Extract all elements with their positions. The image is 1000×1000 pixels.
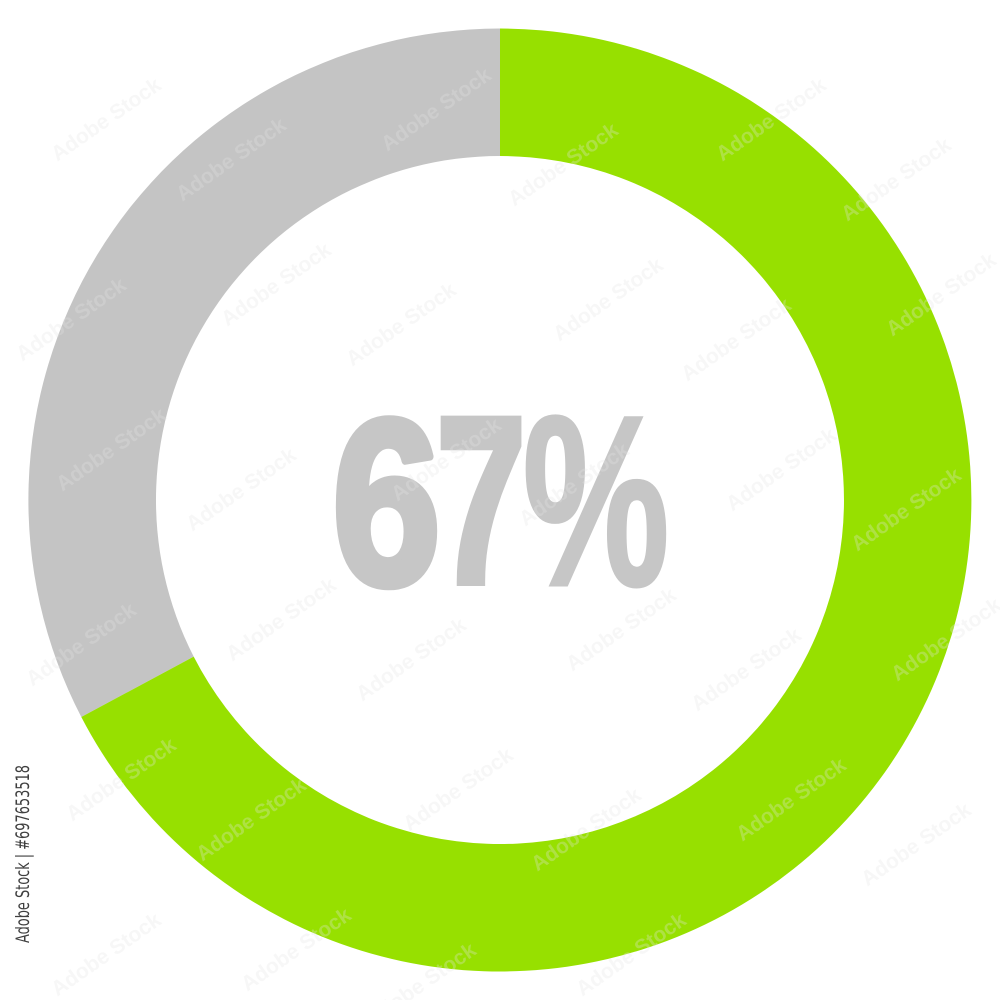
watermark: Adobe Stock xyxy=(687,623,806,716)
watermark: Adobe Stock xyxy=(722,423,841,516)
watermark: Adobe Stock xyxy=(172,113,291,206)
watermark: Adobe Stock xyxy=(47,73,166,166)
percentage label xyxy=(332,366,669,638)
watermark: Adobe Stock xyxy=(732,753,851,846)
watermark: Adobe Stock xyxy=(192,773,311,866)
watermark: Adobe Stock xyxy=(837,133,956,226)
watermark: Adobe Stock xyxy=(342,278,461,371)
remaining 33% grey segment xyxy=(28,28,500,717)
watermark: Adobe Stock xyxy=(352,613,471,706)
watermark: Adobe Stock xyxy=(52,403,171,496)
watermark: Adobe Stock xyxy=(712,73,831,166)
watermark: Adobe Stock xyxy=(62,733,181,826)
watermark: Adobe Stock xyxy=(237,903,356,996)
watermark: Adobe Stock xyxy=(847,463,966,556)
watermark: Adobe Stock xyxy=(527,783,646,876)
watermark: Adobe Stock xyxy=(549,253,668,346)
watermark: Adobe Stock xyxy=(562,583,681,676)
digit 6: 6 xyxy=(332,371,441,634)
watermark: Adobe Stock xyxy=(182,443,301,536)
watermark: Adobe Stock xyxy=(515,438,634,531)
watermark: Adobe Stock xyxy=(47,908,166,1000)
watermark: Adobe Stock xyxy=(387,413,506,506)
watermark: Adobe Stock xyxy=(22,598,141,691)
watermark: Adobe Stock xyxy=(572,908,691,1000)
watermark: Adobe Stock xyxy=(377,63,496,156)
watermark: Adobe Stock xyxy=(12,273,131,366)
watermark: Adobe Stock xyxy=(677,293,796,386)
watermark: Adobe Stock xyxy=(222,573,341,666)
watermark: Adobe Stock xyxy=(399,743,518,836)
watermark: Adobe Stock xyxy=(857,798,976,891)
digit 7: 7 xyxy=(436,368,526,632)
watermark: Adobe Stock xyxy=(504,118,623,211)
percent sign: % xyxy=(523,366,669,638)
watermark: Adobe Stock xyxy=(882,248,1000,341)
watermark: Adobe Stock xyxy=(217,238,336,331)
stock image id: Adobe Stock | #697653518 xyxy=(12,765,34,943)
